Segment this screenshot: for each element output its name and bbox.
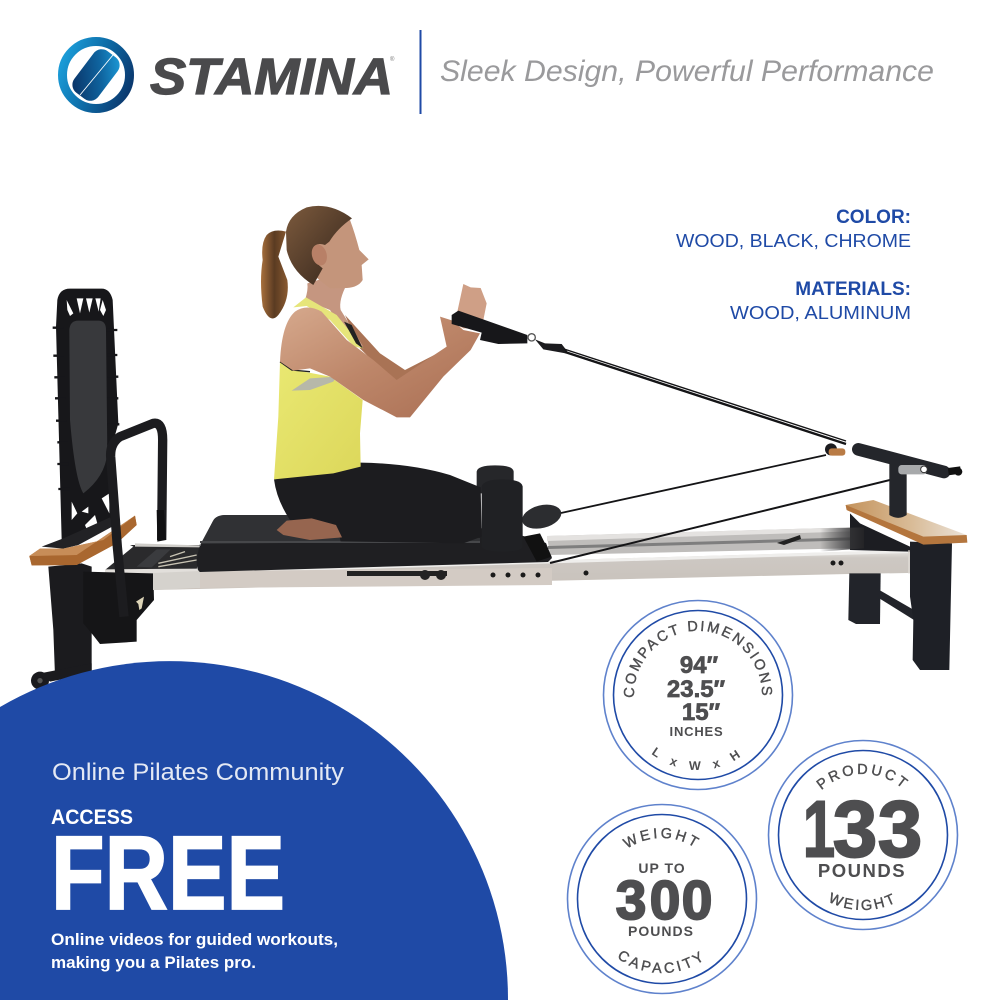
brand wordmark: ® xyxy=(390,56,395,63)
far arm xyxy=(345,315,450,382)
neck xyxy=(305,278,363,347)
ear xyxy=(309,243,329,267)
legs in black leggings xyxy=(274,463,482,543)
badge: weight capacity: UP TO xyxy=(638,860,686,876)
spec text: color and materials: COLOR: xyxy=(836,207,911,228)
wood platform xyxy=(846,500,967,544)
reformer head end with pulley bar and wood platform xyxy=(820,443,967,670)
ponytail xyxy=(261,231,288,319)
feet xyxy=(277,518,342,540)
reformer rails xyxy=(153,527,908,590)
spec text: color and materials xyxy=(676,207,911,323)
badge: compact dimensions: 94″ xyxy=(680,652,719,679)
hands xyxy=(452,284,487,328)
community heading: Online Pilates Community xyxy=(52,759,345,786)
icon: Stamina logo mark xyxy=(62,42,130,108)
badge: product weight: 33 xyxy=(833,784,922,874)
spec text: color and materials: WOOD, ALUMINUM xyxy=(730,302,911,323)
badge: weight capacity: WEIGHT xyxy=(622,828,700,848)
badge: product weight xyxy=(768,740,958,930)
badge: product weight: PRODUCT xyxy=(816,764,908,790)
header: brand logo and tagline xyxy=(62,30,934,114)
badge: compact dimensions: COMPACT DIMENSIONS xyxy=(624,620,772,698)
front leg xyxy=(910,542,952,670)
back leg and brace xyxy=(848,573,881,624)
yellow tank top xyxy=(274,362,363,479)
header divider xyxy=(420,30,422,114)
spec text: color and materials: MATERIALS: xyxy=(795,279,911,300)
strap handle xyxy=(452,311,527,344)
badge: compact dimensions xyxy=(602,600,794,790)
reformer foot end with jump board and handle xyxy=(29,289,200,690)
badge: product weight: 1 xyxy=(803,784,835,874)
pulley post xyxy=(889,463,907,518)
free offer description: making you a Pilates pro. xyxy=(51,954,256,972)
spec text: color and materials: WOOD, BLACK, CHROME xyxy=(676,230,911,251)
resistance cables xyxy=(550,349,890,563)
blue circle panel: online community xyxy=(0,661,508,1000)
badge: weight capacity: 300 xyxy=(616,869,712,931)
badge: product weight: POUNDS xyxy=(818,860,906,881)
carriage padded platform xyxy=(153,515,552,590)
brand wordmark: STAMINA xyxy=(150,48,393,105)
pulley with wood block xyxy=(825,443,837,455)
near arm and shoulder xyxy=(280,307,480,417)
head hair xyxy=(286,206,352,285)
badge: compact dimensions: INCHES xyxy=(670,724,723,739)
access label: ACCESS xyxy=(51,806,133,829)
tagline: Sleek Design, Powerful Performance xyxy=(440,55,934,88)
product photo: woman on pilates reformer xyxy=(29,206,967,690)
free offer description: Online videos for guided workouts, xyxy=(51,931,338,949)
FREE headline: FREE xyxy=(51,815,285,932)
shoulder rests and headrest xyxy=(477,465,564,562)
face xyxy=(310,220,369,288)
badge: product weight: WEIGHT xyxy=(830,892,893,910)
tank strap xyxy=(293,297,363,348)
badge: compact dimensions: 23.5″ xyxy=(667,676,726,703)
badge: weight capacity: CAPACITY xyxy=(618,950,702,974)
badge: weight capacity: POUNDS xyxy=(628,923,694,939)
woman seated with straps xyxy=(261,206,569,562)
badge: compact dimensions: L x W x H xyxy=(652,747,740,770)
free offer description xyxy=(51,931,338,972)
badge: weight capacity xyxy=(566,804,758,994)
badge: compact dimensions: 15″ xyxy=(682,699,721,726)
